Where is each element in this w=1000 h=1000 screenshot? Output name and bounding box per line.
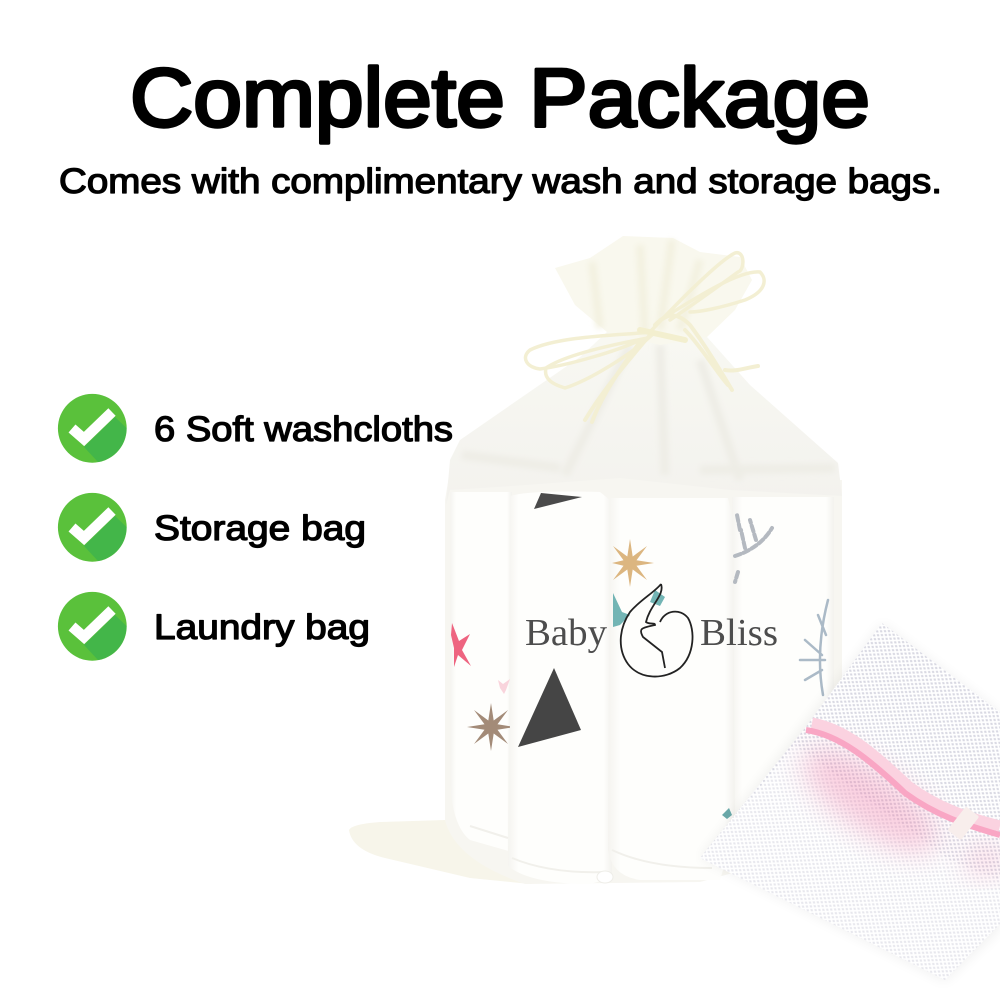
- towel prints: [451, 493, 828, 819]
- item: storage bag: Storage bag: [154, 509, 366, 548]
- lower white mesh: [700, 745, 1000, 980]
- knot folds: [592, 240, 700, 335]
- print: small teal star: [722, 808, 732, 819]
- subtitle: Comes with complimentary wash and storage bags.: [59, 162, 942, 201]
- storage bag with washcloths: [349, 236, 842, 884]
- brand logo: [525, 584, 778, 677]
- pink tint: [794, 738, 946, 862]
- logo word: Bliss: Bliss: [700, 612, 778, 654]
- ribbon: [525, 253, 764, 422]
- print: blue-grey sprig: [800, 600, 828, 695]
- bag knot: [555, 236, 752, 345]
- print: black triangle: [518, 668, 581, 747]
- bag foot fabric: [349, 820, 560, 884]
- washcloths: [450, 492, 834, 884]
- checklist: [58, 394, 453, 661]
- zipper edge lace: [812, 723, 1000, 826]
- print: faint pink star: [498, 679, 510, 694]
- item: storage bag: [58, 493, 366, 562]
- print: teal star: [613, 590, 665, 627]
- drawstring knob: [597, 871, 613, 883]
- logo emblem: [621, 584, 693, 677]
- washcloth 3: [608, 498, 735, 880]
- washcloth 2: [508, 492, 612, 884]
- mesh bag body: [700, 623, 1000, 980]
- logo word: Baby: Baby: [525, 612, 607, 654]
- mesh bag inner tints: [700, 723, 1000, 980]
- item: 6 soft washcloths: 6 Soft washcloths: [154, 410, 453, 449]
- bag lower body: [445, 470, 842, 884]
- print: top triangle: [534, 493, 582, 509]
- item: laundry bag: Laundry bag: [154, 608, 370, 647]
- print: grey leaves: [735, 515, 772, 582]
- right pink tint: [963, 844, 1000, 876]
- zipper pull tab: [947, 806, 979, 840]
- print: gold star: [612, 539, 654, 587]
- title: Complete Package: [130, 51, 870, 144]
- item: laundry bag: [58, 592, 370, 661]
- item: 6 soft washcloths: [58, 394, 453, 463]
- washcloth 4: [732, 497, 834, 850]
- towel hems: [470, 826, 712, 872]
- zipper: [806, 730, 1000, 835]
- organza veil folds: [462, 345, 835, 480]
- mesh bag shadow: [700, 623, 1000, 982]
- washcloth 1: [450, 492, 512, 852]
- organza veil upper: [446, 332, 842, 505]
- print: pink star: [451, 623, 471, 667]
- laundry mesh bag: [700, 623, 1000, 982]
- print: brown star: [467, 703, 510, 751]
